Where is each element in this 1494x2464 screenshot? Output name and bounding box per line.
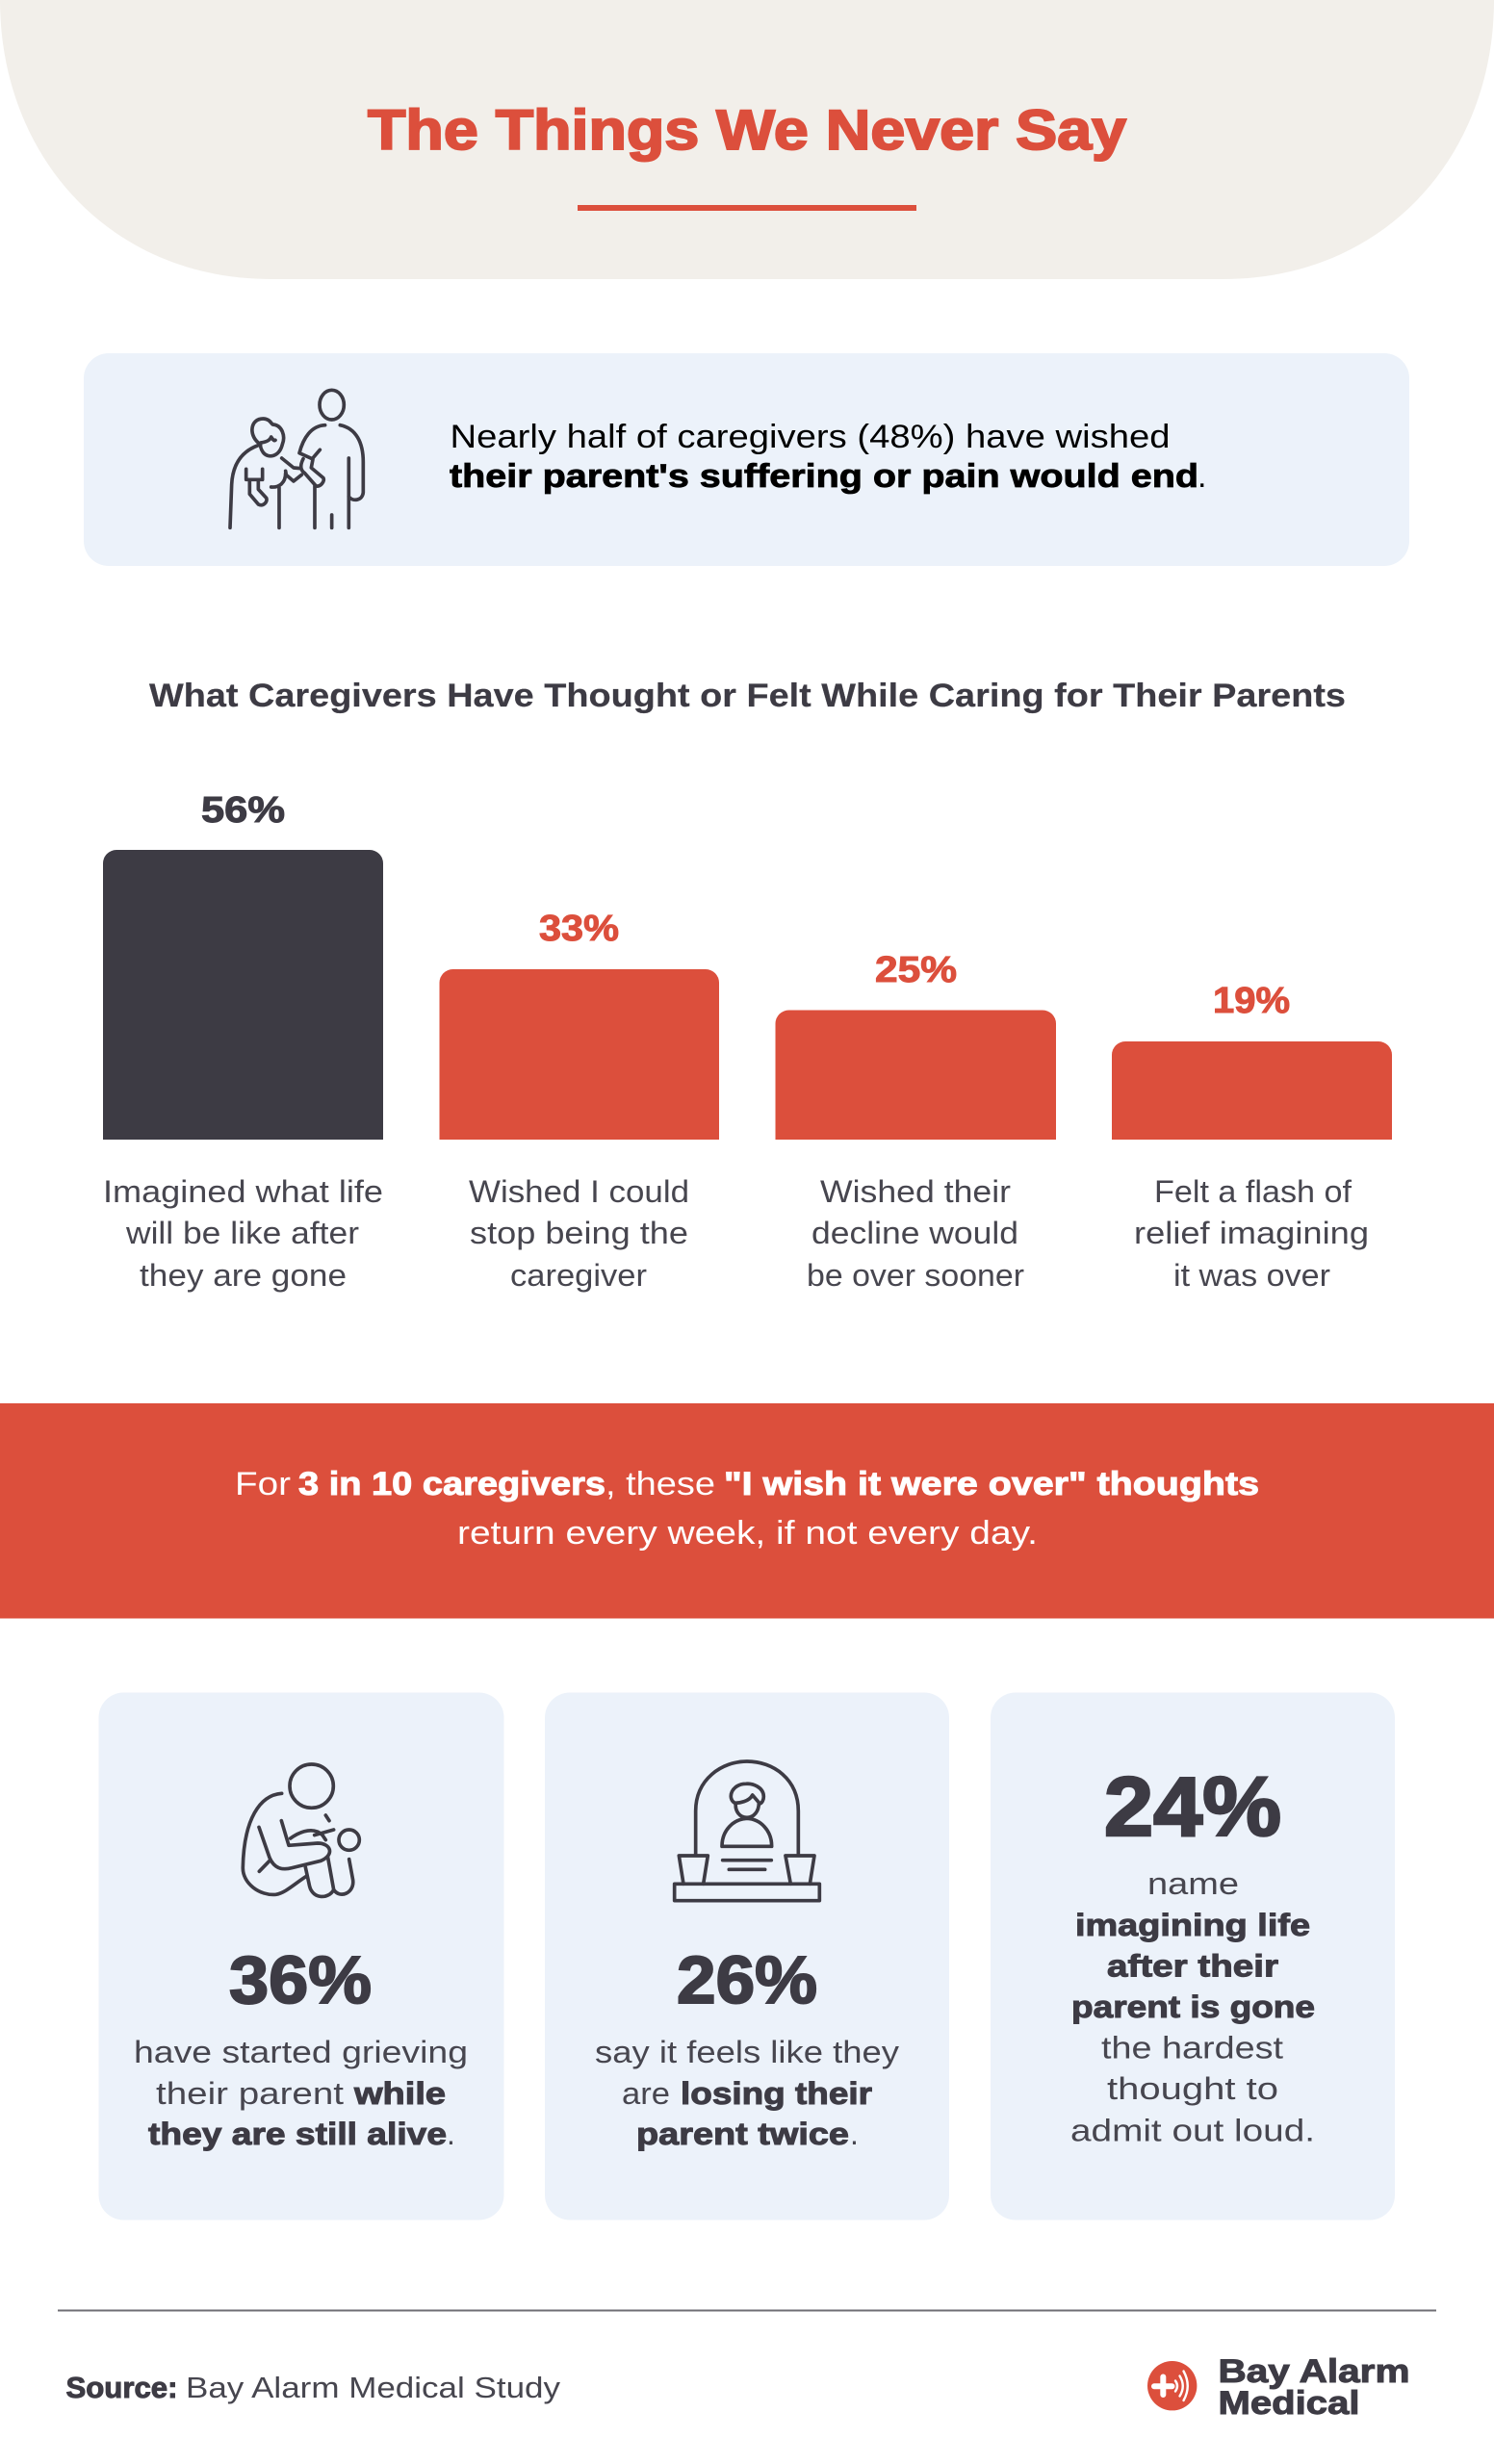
- red banner: For: [235, 1466, 291, 1502]
- footer divider: [58, 2310, 1436, 2312]
- bar: 19%: [1112, 981, 1392, 1293]
- bar: 25%: Wished their: [820, 1174, 1011, 1209]
- bar: 19%: it was over: [1173, 1258, 1330, 1293]
- bar: 33%: stop being the: [470, 1216, 688, 1250]
- bar chart: [103, 790, 1392, 1293]
- bar: 33%: [439, 909, 719, 1293]
- card text: [595, 2035, 899, 2151]
- bar: 56%: 56%: [201, 790, 285, 831]
- callout text: [450, 419, 1206, 495]
- card text: the hardest: [1101, 2031, 1283, 2066]
- card text: .: [447, 2117, 455, 2151]
- red banner: 3 in 10 caregivers: [298, 1466, 605, 1502]
- source text: [65, 2371, 561, 2404]
- source text: Bay Alarm Medical Study: [186, 2371, 561, 2404]
- card text: [1070, 1866, 1315, 2148]
- card text: .: [850, 2117, 859, 2151]
- bar: 33%: 33%: [539, 909, 619, 949]
- bar: 25%: be over sooner: [807, 1258, 1024, 1293]
- stat: 36%: 36%: [229, 1942, 372, 2017]
- bar: 56%: they are gone: [140, 1258, 347, 1293]
- red banner: return every week, if not every day.: [457, 1515, 1038, 1552]
- bar: 19%: Felt a flash of: [1154, 1174, 1352, 1209]
- bar: 25%: 25%: [875, 950, 957, 990]
- card text: their parent: [156, 2076, 344, 2111]
- callout text: Nearly half of caregivers (48%) have wished: [451, 419, 1171, 455]
- title: The Things We Never Say: [368, 99, 1126, 162]
- card text: parent twice: [636, 2117, 849, 2151]
- panel: 36% grieving: [98, 1692, 504, 2220]
- icon: gravestone with portrait: [675, 1761, 819, 1901]
- header panel: [0, 0, 1494, 279]
- panel: 24% hardest thought: [991, 1692, 1395, 2220]
- card text: name: [1147, 1866, 1239, 1901]
- title underline: [578, 205, 916, 211]
- icon: person sitting grieving: [243, 1764, 359, 1896]
- card text: say it feels like they: [595, 2035, 899, 2069]
- red banner: [0, 1403, 1494, 1619]
- bar: 56%: Imagined what life: [103, 1174, 383, 1209]
- callout text: .: [1198, 458, 1206, 495]
- bar: 33%: caregiver: [510, 1258, 647, 1293]
- bar: 19%: relief imagining: [1134, 1216, 1369, 1250]
- bar: 19%: 19%: [1213, 981, 1290, 1021]
- logo: Bay Alarm Medical: [1147, 2353, 1409, 2422]
- card text: while: [353, 2076, 446, 2111]
- stat: 26%: 26%: [677, 1942, 817, 2017]
- bar: 25%: decline would: [811, 1216, 1018, 1250]
- logo: Bay Alarm Medical: Medical: [1219, 2385, 1359, 2422]
- card text: have started grieving: [134, 2035, 468, 2069]
- card text: losing their: [681, 2076, 872, 2111]
- bar: 56%: will be like after: [125, 1216, 359, 1250]
- source text: Source:: [65, 2371, 177, 2404]
- bar: 56%: [103, 790, 383, 1293]
- panel: 48% callout: [84, 353, 1409, 566]
- card text: [134, 2035, 468, 2151]
- card text: thought to: [1107, 2071, 1278, 2106]
- bar: 33%: Wished I could: [469, 1174, 689, 1209]
- bar: 25%: [776, 950, 1056, 1293]
- icon: caregiver and elderly parent: [230, 390, 363, 527]
- red banner: "I wish it were over" thoughts: [724, 1466, 1259, 1502]
- card text: parent is gone: [1071, 1989, 1315, 2024]
- logo: Bay Alarm Medical: Bay Alarm: [1219, 2353, 1409, 2390]
- card text: imagining life: [1075, 1908, 1310, 1942]
- chart heading: What Caregivers Have Thought or Felt While Caring for Their Parents: [149, 678, 1346, 714]
- callout text: their parent's suffering or pain would end: [450, 458, 1198, 495]
- stat: 24%: 24%: [1104, 1760, 1281, 1854]
- card text: admit out loud.: [1070, 2114, 1315, 2148]
- panel: 26% losing twice: [545, 1692, 949, 2220]
- card text: after their: [1107, 1948, 1278, 1983]
- red banner: , these: [605, 1466, 715, 1502]
- card text: they are still alive: [148, 2117, 447, 2151]
- card text: are: [622, 2076, 670, 2111]
